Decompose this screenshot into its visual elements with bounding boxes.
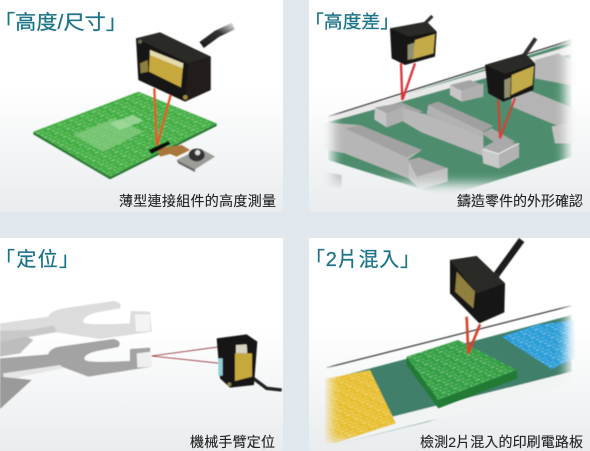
icon: laser sensor — [217, 334, 257, 388]
icon: lower robot fork — [0, 337, 152, 409]
illustration: robot arm and sensor — [0, 301, 282, 409]
icon: laser beams — [154, 88, 171, 145]
icon: circuit board — [33, 92, 217, 179]
icon: laser sensor — [450, 256, 505, 323]
icon: conveyor edge line — [327, 306, 572, 368]
icon: sensor cable — [202, 26, 233, 45]
panel: positioning — [0, 238, 283, 451]
icon: right sensor — [485, 38, 536, 102]
illustration: sensor above conveyor — [325, 240, 575, 447]
icon: laser beams — [152, 347, 220, 363]
icon: green board — [328, 42, 572, 197]
icon: conveyor belt — [346, 314, 572, 442]
icon: left sensor — [390, 16, 437, 65]
icon: machine edge line — [328, 40, 572, 117]
icon: laser beams right sensor — [498, 98, 515, 138]
icon: sensor cable — [253, 378, 282, 390]
icon: blue circuit board — [502, 320, 575, 369]
caption: 薄型連接組件的高度測量 — [119, 193, 276, 209]
icon: yellow circuit board — [325, 370, 396, 443]
icon: cast part frame — [328, 46, 572, 189]
panel: height / dimension — [0, 0, 283, 212]
icon: upper robot fork — [0, 301, 152, 342]
title: 「2片混入」 — [305, 248, 420, 271]
caption: 機械手臂定位 — [190, 434, 275, 450]
caption: 鑄造零件的外形確認 — [457, 193, 583, 209]
title: 「高度差」 — [305, 12, 399, 32]
icon: sensor cable — [495, 240, 522, 277]
icon: flex cable and camera module — [148, 141, 215, 172]
panel: two sheets mixed — [305, 238, 590, 451]
panel: height difference — [305, 0, 590, 212]
icon: green circuit board — [407, 340, 518, 408]
caption: 檢測2片混入的印刷電路板 — [420, 434, 583, 450]
illustration: sensors above cast part — [327, 14, 572, 192]
illustration: sensor above circuit board — [33, 26, 233, 179]
icon: laser beams — [467, 317, 480, 353]
icon: laser sensor — [136, 32, 211, 102]
icon: laser beams left sensor — [401, 63, 415, 100]
